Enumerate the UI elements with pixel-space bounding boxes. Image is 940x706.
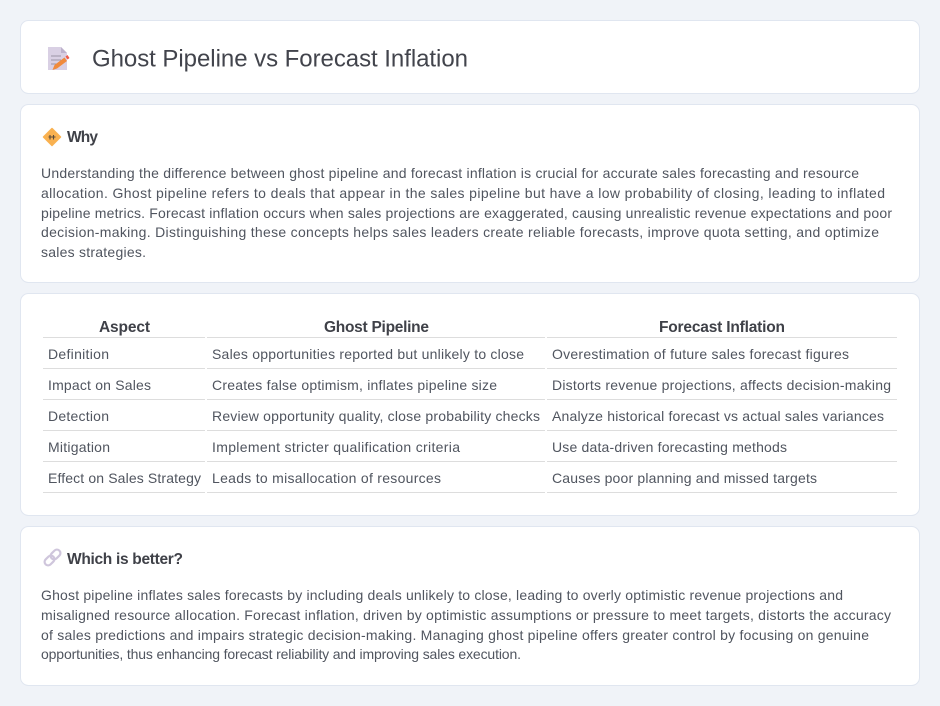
table header row: Aspect <box>99 319 150 336</box>
table row: effect on sales strategy: Effect on Sales Strategy <box>48 470 201 486</box>
table row: mitigation: Mitigation <box>48 439 110 455</box>
text block: why explanation: allocation. Ghost pipeline refers to deals that appear in the sales pipeline but have a low probability of closing, leading to inflated <box>41 185 885 201</box>
table row: effect on sales strategy <box>48 470 817 486</box>
heading: why: Why <box>67 129 98 146</box>
text block: verdict <box>41 587 891 662</box>
text block: verdict: of sales predictions and impairs strategic decision-making. Managing ghost pipeline offers greater control by focusing on genuine <box>41 627 869 643</box>
text block: why explanation: pipeline metrics. Forecast inflation occurs when sales projections are exaggerated, causing unrealistic revenue expectations and poor <box>41 205 892 221</box>
table header row <box>99 319 785 336</box>
table row: mitigation: Use data-driven forecasting methods <box>552 439 787 455</box>
table row: definition: Definition <box>48 346 109 362</box>
text block: why explanation: Understanding the difference between ghost pipeline and forecast inflation is crucial for accurate sales forecasting and resource <box>41 165 859 181</box>
panel: comparison table <box>20 294 920 516</box>
table row: definition: Overestimation of future sales forecast figures <box>552 346 849 362</box>
table row: impact on sales <box>48 377 891 393</box>
icon: warning diamond <box>44 128 60 146</box>
heading: which is better: Which is better? <box>67 551 183 568</box>
table row: mitigation <box>48 439 787 455</box>
title: Ghost Pipeline vs Forecast Inflation <box>92 46 468 72</box>
table row: impact on sales: Distorts revenue projections, affects decision-making <box>552 377 891 393</box>
panel: title header <box>20 20 920 94</box>
table row: impact on sales: Impact on Sales <box>48 377 151 393</box>
text block: why explanation <box>41 165 892 260</box>
table row: definition: Sales opportunities reported but unlikely to close <box>212 346 524 362</box>
panel: why <box>20 104 920 282</box>
text block: why explanation: sales strategies. <box>41 244 146 260</box>
text block: verdict: opportunities, thus enhancing forecast reliability and improving sales execution. <box>41 646 521 662</box>
text block: why explanation: decision-making. Distinguishing these concepts helps sales leaders create reliable forecasts, improve quota setting, and optimize <box>41 224 879 240</box>
table header row: Forecast Inflation <box>659 319 785 336</box>
table row: impact on sales: Creates false optimism, inflates pipeline size <box>212 377 497 393</box>
icon: chain link <box>43 548 62 567</box>
table row: effect on sales strategy: Leads to misallocation of resources <box>212 470 441 486</box>
panel: which is better <box>20 526 920 686</box>
table row: detection: Analyze historical forecast vs actual sales variances <box>552 408 884 424</box>
text block: verdict: Ghost pipeline inflates sales forecasts by including deals unlikely to close, leading to overly optimistic revenue projections and <box>41 587 843 603</box>
table row: detection <box>48 408 884 424</box>
table row: detection: Detection <box>48 408 109 424</box>
text block: verdict: misaligned resource allocation. Forecast inflation, driven by optimistic assumptions or pressure to meet targets, distorts the accuracy <box>41 607 891 623</box>
table row: detection: Review opportunity quality, close probability checks <box>212 408 540 424</box>
table row: effect on sales strategy: Causes poor planning and missed targets <box>552 470 817 486</box>
icon: memo with pencil <box>48 47 70 70</box>
table row: mitigation: Implement stricter qualification criteria <box>212 439 460 455</box>
table header row: Ghost Pipeline <box>324 319 429 336</box>
table row: definition <box>48 346 849 362</box>
